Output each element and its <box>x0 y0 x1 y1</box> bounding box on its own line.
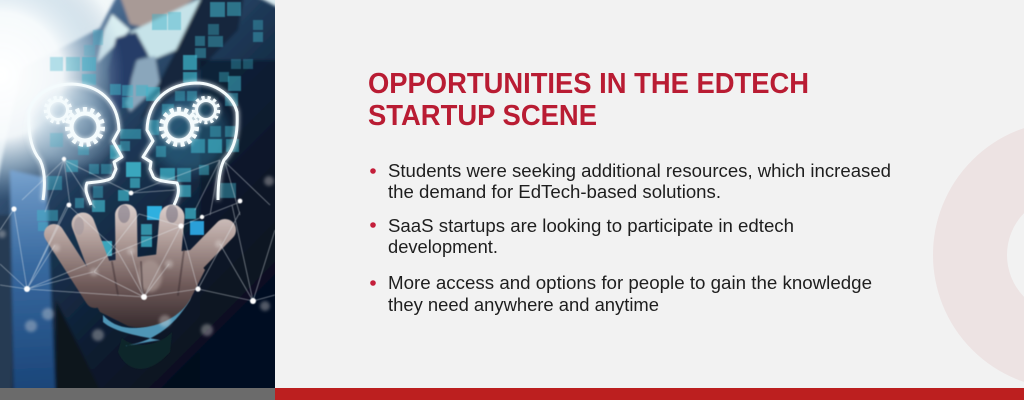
bullet 2: development. <box>388 237 498 257</box>
bullet 1 <box>370 161 891 202</box>
title: OPPORTUNITIES IN THE EDTECH <box>368 68 809 100</box>
decorative ring <box>970 158 1024 352</box>
bullet 3 <box>370 273 872 315</box>
title <box>368 68 809 132</box>
icon: suit body <box>0 0 290 400</box>
network lines and nodes <box>0 157 275 341</box>
bullet 3: More access and options for people to gain the knowledge <box>388 273 872 293</box>
bullet 1: Students were seeking additional resources, which increased <box>388 161 891 181</box>
icon: shirt cuff <box>103 292 192 369</box>
bullet 3: they need anywhere and anytime <box>388 295 659 315</box>
photo: businessman hand with digital heads <box>0 0 290 400</box>
grey footer bar <box>0 388 275 400</box>
bullet 2: SaaS startups are looking to participate in edtech <box>388 216 794 236</box>
lower left body tone <box>0 215 12 400</box>
icon: necktie <box>108 32 148 118</box>
suit right lapel <box>140 0 245 120</box>
soft interior tone behind heads <box>35 92 228 173</box>
icon: hand with fingers <box>54 205 225 327</box>
icon: neck and shirt collar <box>97 0 205 112</box>
bullet list <box>370 161 891 315</box>
digital pixel squares <box>37 2 263 256</box>
title: STARTUP SCENE <box>368 100 597 132</box>
icon: two head outlines with gears <box>29 83 237 205</box>
red footer bar <box>275 388 1024 400</box>
bullet 2 <box>370 216 794 257</box>
sleeve left <box>10 170 56 400</box>
bullet 1: the demand for EdTech-based solutions. <box>388 182 721 202</box>
